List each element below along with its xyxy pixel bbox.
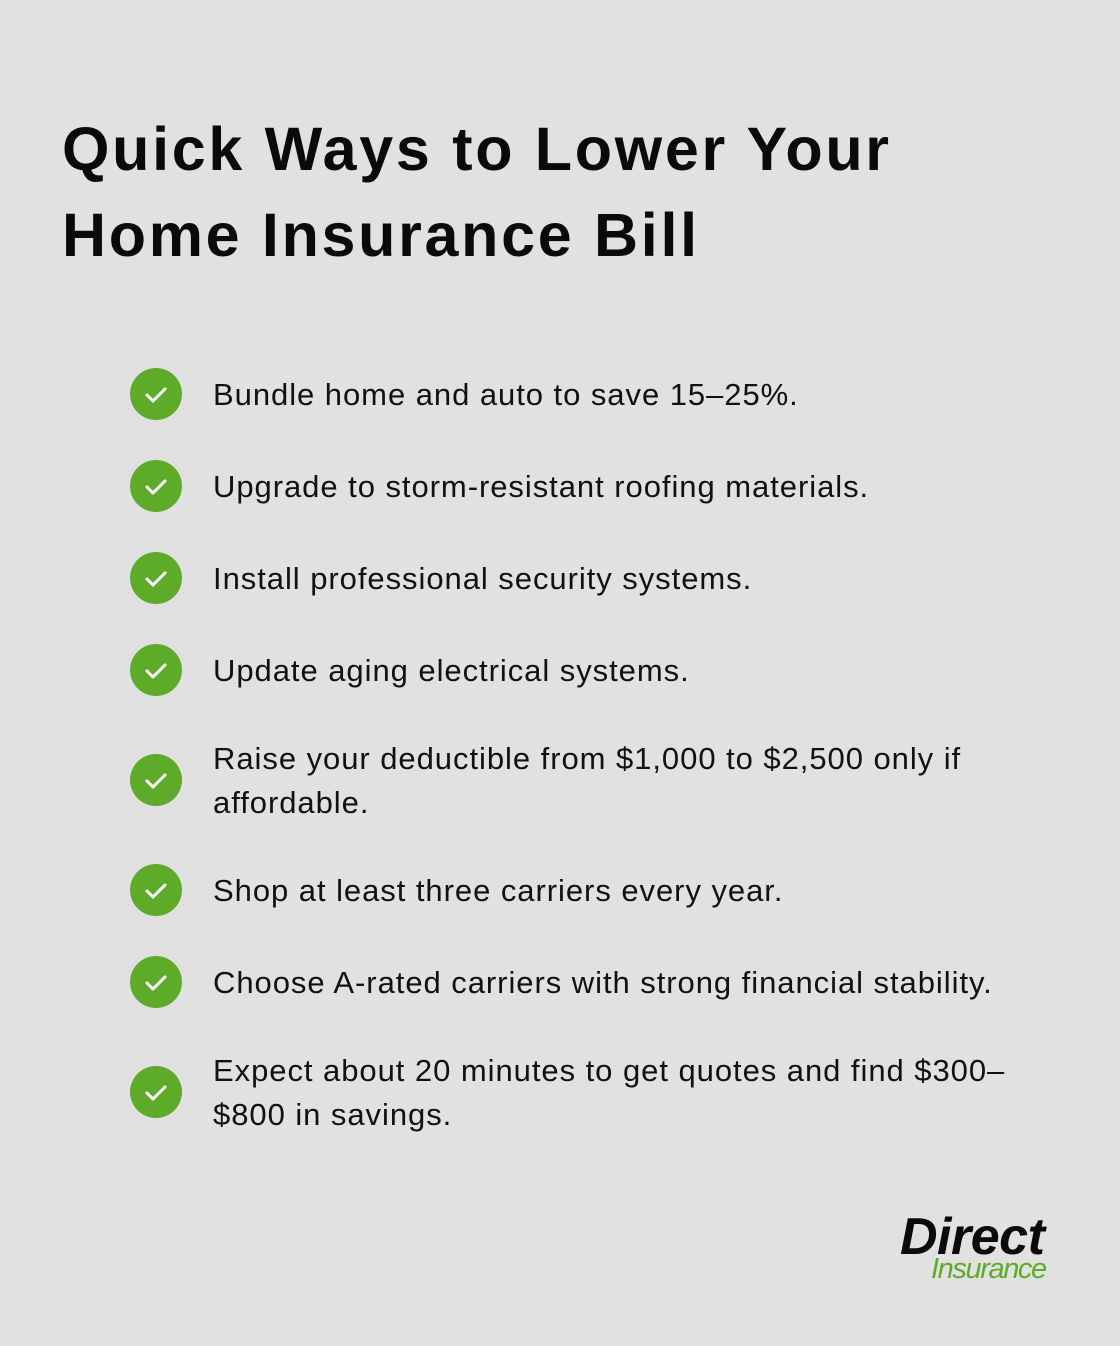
title: Home Insurance Bill [62, 201, 700, 269]
list item 8: $800 in savings. [213, 1097, 452, 1132]
list item 1: Bundle home and auto to save 15–25%. [213, 377, 799, 412]
list item 5: affordable. [213, 785, 369, 820]
list item 3 [130, 552, 752, 604]
list item 7: Choose A-rated carriers with strong financial stability. [213, 965, 993, 1000]
list item 8 [130, 1053, 1005, 1132]
title: Quick Ways to Lower Your [62, 115, 892, 183]
list item 4: Update aging electrical systems. [213, 653, 690, 688]
list item 6 [130, 864, 783, 916]
list item 2: Upgrade to storm-resistant roofing materials. [213, 469, 869, 504]
list item 4 [130, 644, 690, 696]
list item 5 [130, 741, 961, 820]
title [62, 115, 892, 269]
list item 3: Install professional security systems. [213, 561, 752, 596]
list item 2 [130, 460, 869, 512]
list item 7 [130, 956, 993, 1008]
list item 1 [130, 368, 799, 420]
logo: Insurance [931, 1253, 1046, 1285]
list item 8: Expect about 20 minutes to get quotes and find $300– [213, 1053, 1005, 1088]
list item 5: Raise your deductible from $1,000 to $2,500 only if [213, 741, 961, 776]
logo: Direct [900, 1208, 1044, 1266]
list item 6: Shop at least three carriers every year. [213, 873, 783, 908]
